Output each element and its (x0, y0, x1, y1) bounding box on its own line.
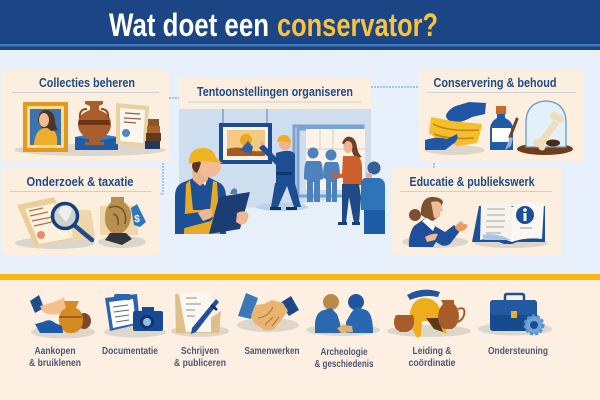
icon: handshake (237, 293, 299, 332)
panel: onderzoek en taxatie (2, 168, 160, 255)
bottom band (0, 274, 600, 400)
icon: hands and vase (30, 295, 95, 338)
icon: paper and pen (171, 292, 229, 337)
panel: tentoonstellingen organiseren (175, 78, 385, 234)
label: samenwerken: Samenwerken (244, 346, 300, 357)
illustration: framed painting (219, 109, 272, 164)
header banner (0, 0, 600, 50)
illustration: worker hanging painting (256, 135, 308, 211)
icon: open info book (472, 202, 548, 248)
item: documentatie (102, 294, 166, 357)
icon: appraised bust (98, 197, 146, 248)
label: schrijven en publiceren: Schrijven (181, 346, 219, 357)
icon: briefcase and gear (478, 294, 552, 336)
item: ondersteuning (478, 294, 552, 357)
label: documentatie: Documentatie (102, 346, 158, 357)
item: leiding en coordinatie (387, 290, 471, 369)
label: archeologie en geschiedenis: & geschiedenis (314, 359, 374, 370)
title: conservator? (277, 7, 438, 43)
icon: collection objects (14, 101, 166, 156)
item: archeologie en geschiedenis (306, 294, 380, 370)
icon: gloved hands with textile (425, 102, 486, 155)
title: Wat doet een (109, 7, 269, 43)
icon: document and magnifier (15, 197, 95, 249)
label: leiding en coordinatie: coördinatie (408, 358, 456, 369)
heading: educatie en publiekswerk: Educatie & publiekswerk (410, 174, 535, 189)
label: schrijven en publiceren: & publiceren (174, 358, 226, 369)
panel: educatie en publiekswerk (392, 168, 562, 255)
illustration: visitor silhouettes (304, 148, 340, 202)
label: ondersteuning: Ondersteuning (488, 346, 548, 357)
icon: two figures (306, 294, 380, 336)
panel: conservering en behoud (419, 70, 584, 162)
label: archeologie en geschiedenis: Archeologie (320, 347, 368, 358)
heading: collecties beheren: Collecties beheren (39, 75, 135, 90)
icon: helmet and pottery (387, 290, 471, 338)
panel: collecties beheren (2, 70, 169, 162)
item: samenwerken (237, 293, 300, 357)
icon: appraised bust: $ (134, 214, 140, 225)
illustration: guide (329, 137, 362, 225)
illustration: boy visitor (361, 162, 385, 234)
item: aankopen en bruiklenen (29, 295, 95, 369)
label: aankopen en bruiklenen: & bruiklenen (29, 358, 81, 369)
label: aankopen en bruiklenen: Aankopen (34, 346, 76, 357)
icon: bone under glass dome (517, 101, 573, 155)
item: schrijven en publiceren (171, 292, 229, 369)
heading: tentoonstellingen organiseren: Tentoonstellingen organiseren (197, 84, 353, 99)
icon: solvent bottle and brush (490, 106, 517, 150)
heading: onderzoek en taxatie: Onderzoek & taxatie (26, 174, 134, 189)
heading: conservering en behoud: Conservering & behoud (434, 75, 557, 90)
icon: clipboard and camera (104, 294, 166, 338)
illustration: conservator with clipboard (175, 148, 250, 234)
illustration: gallery doorway (294, 126, 365, 204)
icon: educator (402, 197, 468, 248)
label: leiding en coordinatie: Leiding & (412, 346, 452, 357)
